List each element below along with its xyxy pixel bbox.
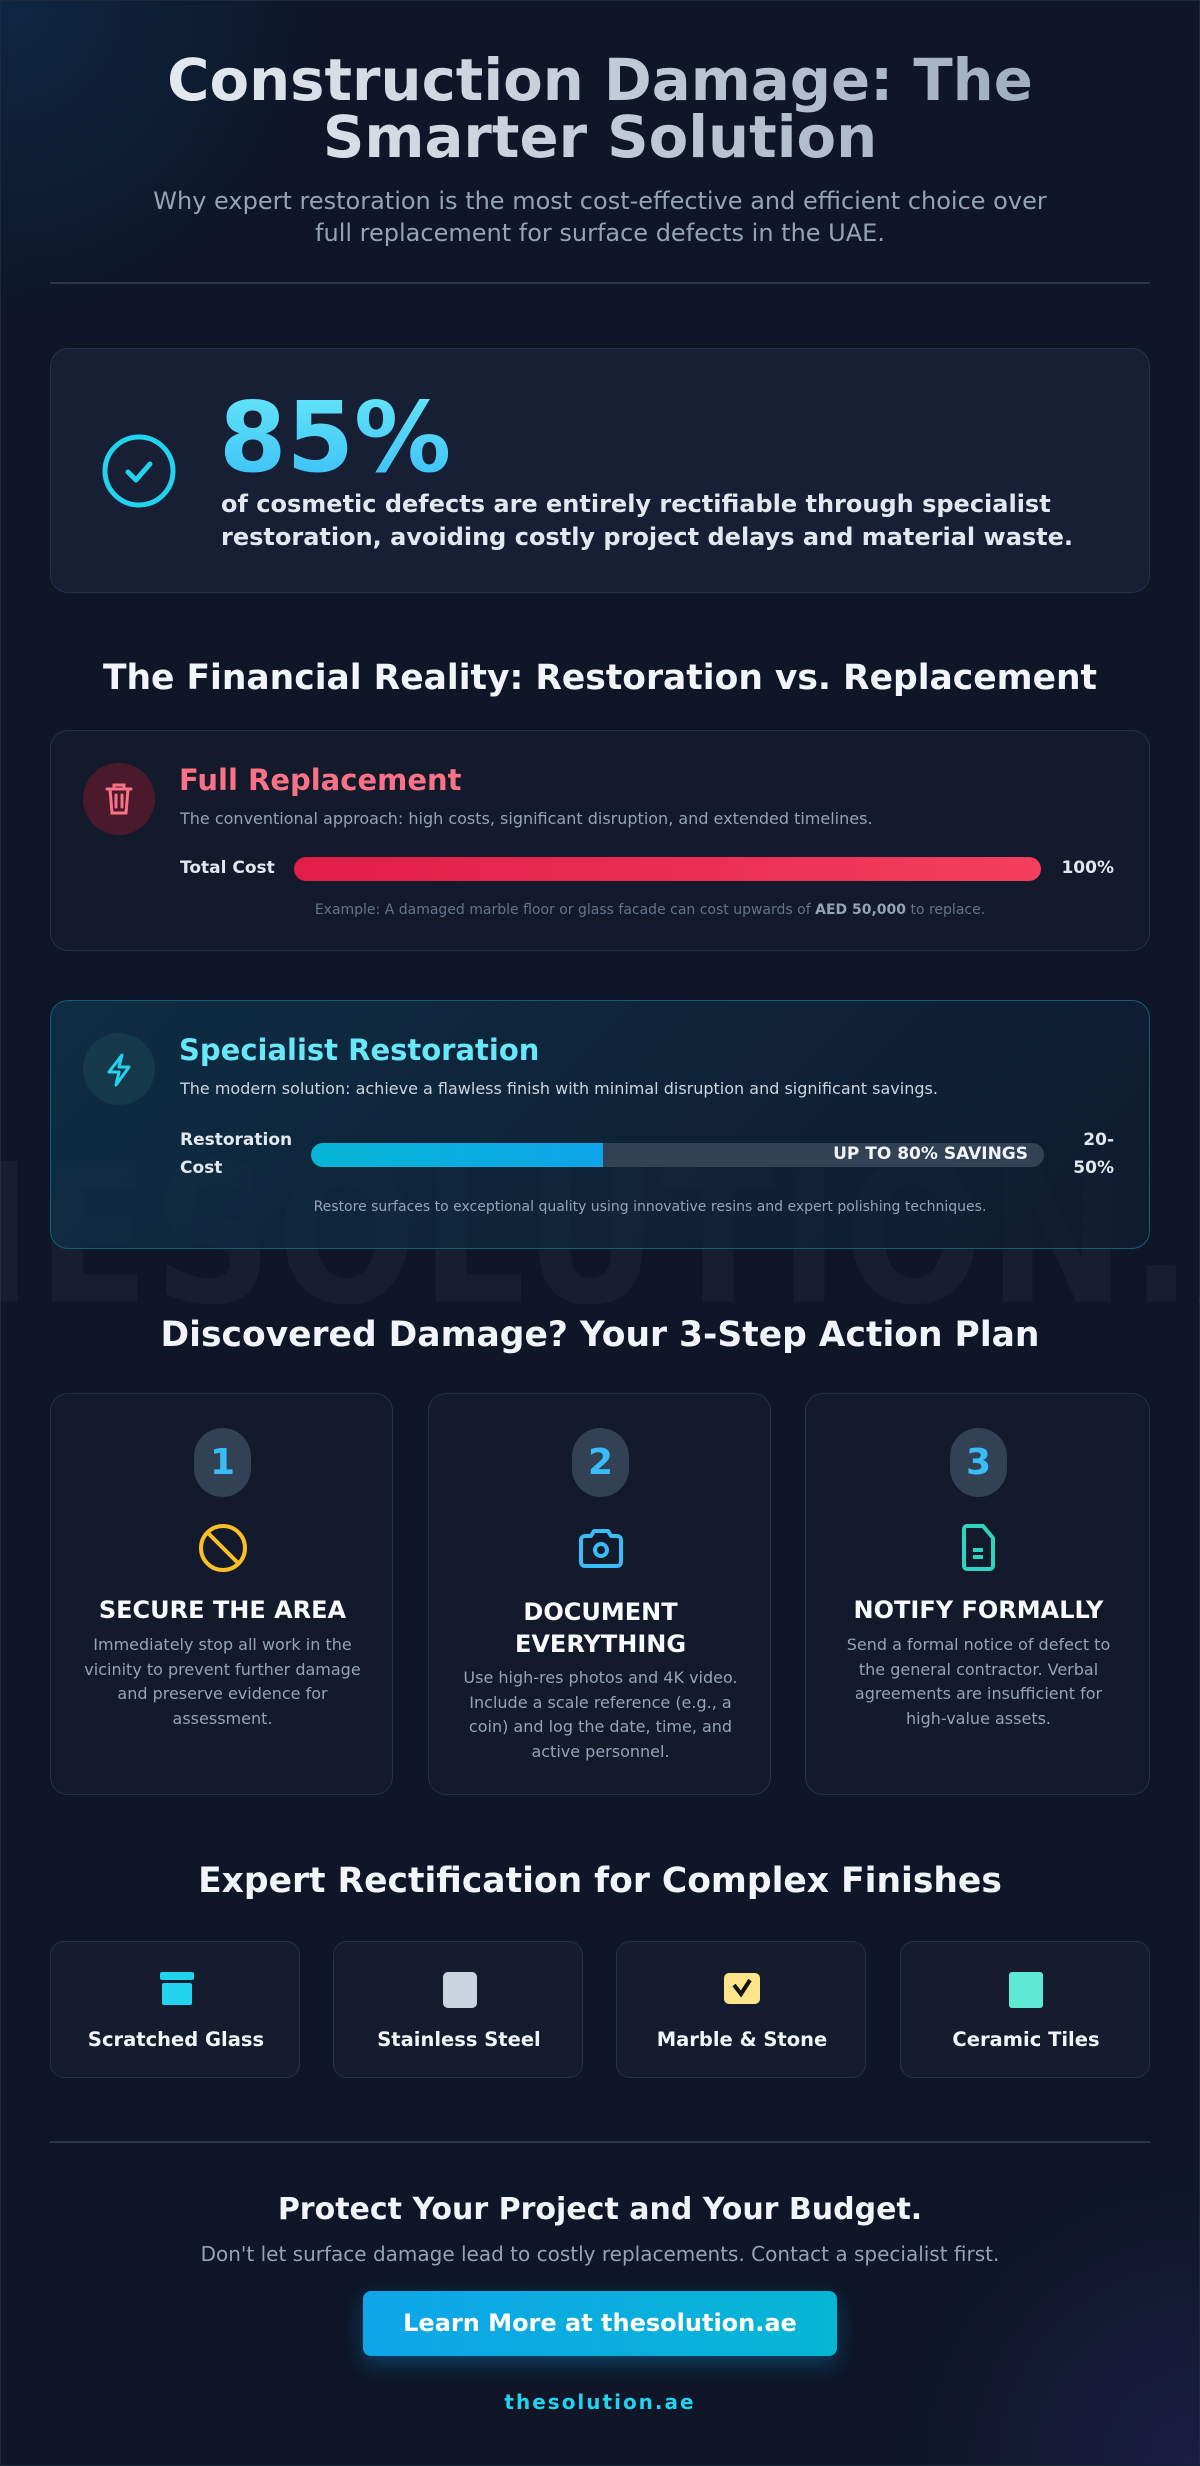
panel: stainless steel bbox=[333, 1941, 583, 2078]
title: Construction Damage: The bbox=[167, 46, 1033, 114]
CTA text: Don't let surface damage lead to costly replacements. Contact a specialist first. bbox=[201, 2242, 999, 2266]
panel: step 1 bbox=[50, 1393, 393, 1795]
number badge bbox=[950, 1428, 1007, 1497]
step title: NOTIFY FORMALLY bbox=[854, 1596, 1103, 1624]
title: Smarter Solution bbox=[323, 103, 877, 171]
panel: ceramic tiles bbox=[900, 1941, 1150, 2078]
heading: expert rectification: Expert Rectification for Complex Finishes bbox=[198, 1861, 1002, 1901]
panel: specialist restoration bbox=[50, 1000, 1150, 1249]
panel: marble bbox=[616, 1941, 866, 2078]
icon: document bbox=[962, 1524, 995, 1571]
stat number: 85% bbox=[219, 381, 451, 494]
icon: prohibited bbox=[199, 1524, 247, 1572]
description: The modern solution: achieve a flawless finish with minimal disruption and significant savings. bbox=[180, 1079, 938, 1098]
icon: lightning bbox=[83, 1033, 155, 1105]
bar chart: restoration cost: 50% bbox=[1073, 1158, 1114, 1178]
CTA button: Learn More at thesolution.ae bbox=[403, 2309, 797, 2337]
icon: marble check bbox=[724, 1973, 760, 2004]
note: Restore surfaces to exceptional quality using innovative resins and expert polishing techniques. bbox=[314, 1199, 986, 1215]
icon: steel bbox=[443, 1972, 477, 2008]
title bbox=[0, 52, 1200, 166]
number badge: 3 bbox=[966, 1442, 991, 1483]
step title bbox=[515, 1598, 686, 1658]
CTA heading: Protect Your Project and Your Budget. bbox=[278, 2192, 922, 2227]
step title: SECURE THE AREA bbox=[99, 1596, 346, 1624]
number badge bbox=[194, 1428, 251, 1497]
step title: EVERYTHING bbox=[515, 1630, 686, 1658]
description: The conventional approach: high costs, significant disruption, and extended timelines. bbox=[180, 809, 873, 828]
footer brand: thesolution.ae bbox=[504, 2390, 696, 2414]
icon: camera bbox=[579, 1529, 623, 1568]
number badge bbox=[572, 1428, 629, 1497]
panel: 85% stat bbox=[50, 348, 1150, 593]
note: Example: A damaged marble floor or glass facade can cost upwards of AED 50,000 to replace. bbox=[315, 902, 985, 918]
panel: step 3 bbox=[805, 1393, 1150, 1795]
step text: Use high-res photos and 4K video. Include a scale reference (e.g., a coin) and log the date, time, and active personnel. bbox=[463, 1668, 738, 1760]
heading: financial reality: The Financial Reality: Restoration vs. Replacement bbox=[103, 658, 1097, 698]
step text: Immediately stop all work in the vicinity to prevent further damage and preserve evidence for assessment. bbox=[84, 1635, 361, 1728]
number badge: 2 bbox=[588, 1442, 613, 1483]
icon: glass bbox=[160, 1972, 194, 2005]
icon: check circle bbox=[102, 434, 176, 508]
title: Full Replacement bbox=[179, 763, 462, 797]
step text: Send a formal notice of defect to the general contractor. Verbal agreements are insufficient for high-value assets. bbox=[847, 1635, 1110, 1728]
bar chart: total cost bbox=[180, 857, 1114, 881]
label: Ceramic Tiles bbox=[952, 2028, 1100, 2051]
heading: action plan: Discovered Damage? Your 3-Step Action Plan bbox=[160, 1315, 1040, 1355]
panel: full replacement bbox=[50, 730, 1150, 951]
label: Scratched Glass bbox=[88, 2028, 264, 2051]
bar chart: restoration cost: Cost bbox=[180, 1158, 222, 1178]
subtitle: Why expert restoration is the most cost-effective and efficient choice over full replacement for surface defects in the UAE. bbox=[153, 187, 1047, 247]
icon: trash bbox=[83, 763, 155, 835]
bar chart: restoration cost bbox=[180, 1130, 1114, 1178]
step title: DOCUMENT bbox=[523, 1598, 678, 1626]
label: Stainless Steel bbox=[377, 2028, 541, 2051]
bar chart: restoration cost: 20- bbox=[1083, 1130, 1114, 1150]
bar chart: restoration cost: Restoration bbox=[180, 1130, 292, 1150]
panel: step 2 bbox=[428, 1393, 771, 1795]
CTA button bbox=[363, 2291, 837, 2356]
label: Marble & Stone bbox=[657, 2028, 827, 2051]
panel: scratched glass bbox=[50, 1941, 300, 2078]
bar chart: restoration cost: UP TO 80% SAVINGS bbox=[833, 1144, 1028, 1164]
bar chart: total cost: Total Cost bbox=[180, 858, 275, 878]
stat text: of cosmetic defects are entirely rectifiable through specialist restoration, avoiding costly project delays and material waste. bbox=[221, 490, 1073, 551]
title: Specialist Restoration bbox=[179, 1033, 539, 1067]
bar chart: total cost: 100% bbox=[1061, 858, 1114, 878]
icon: tile bbox=[1009, 1972, 1043, 2008]
number badge: 1 bbox=[210, 1442, 235, 1483]
